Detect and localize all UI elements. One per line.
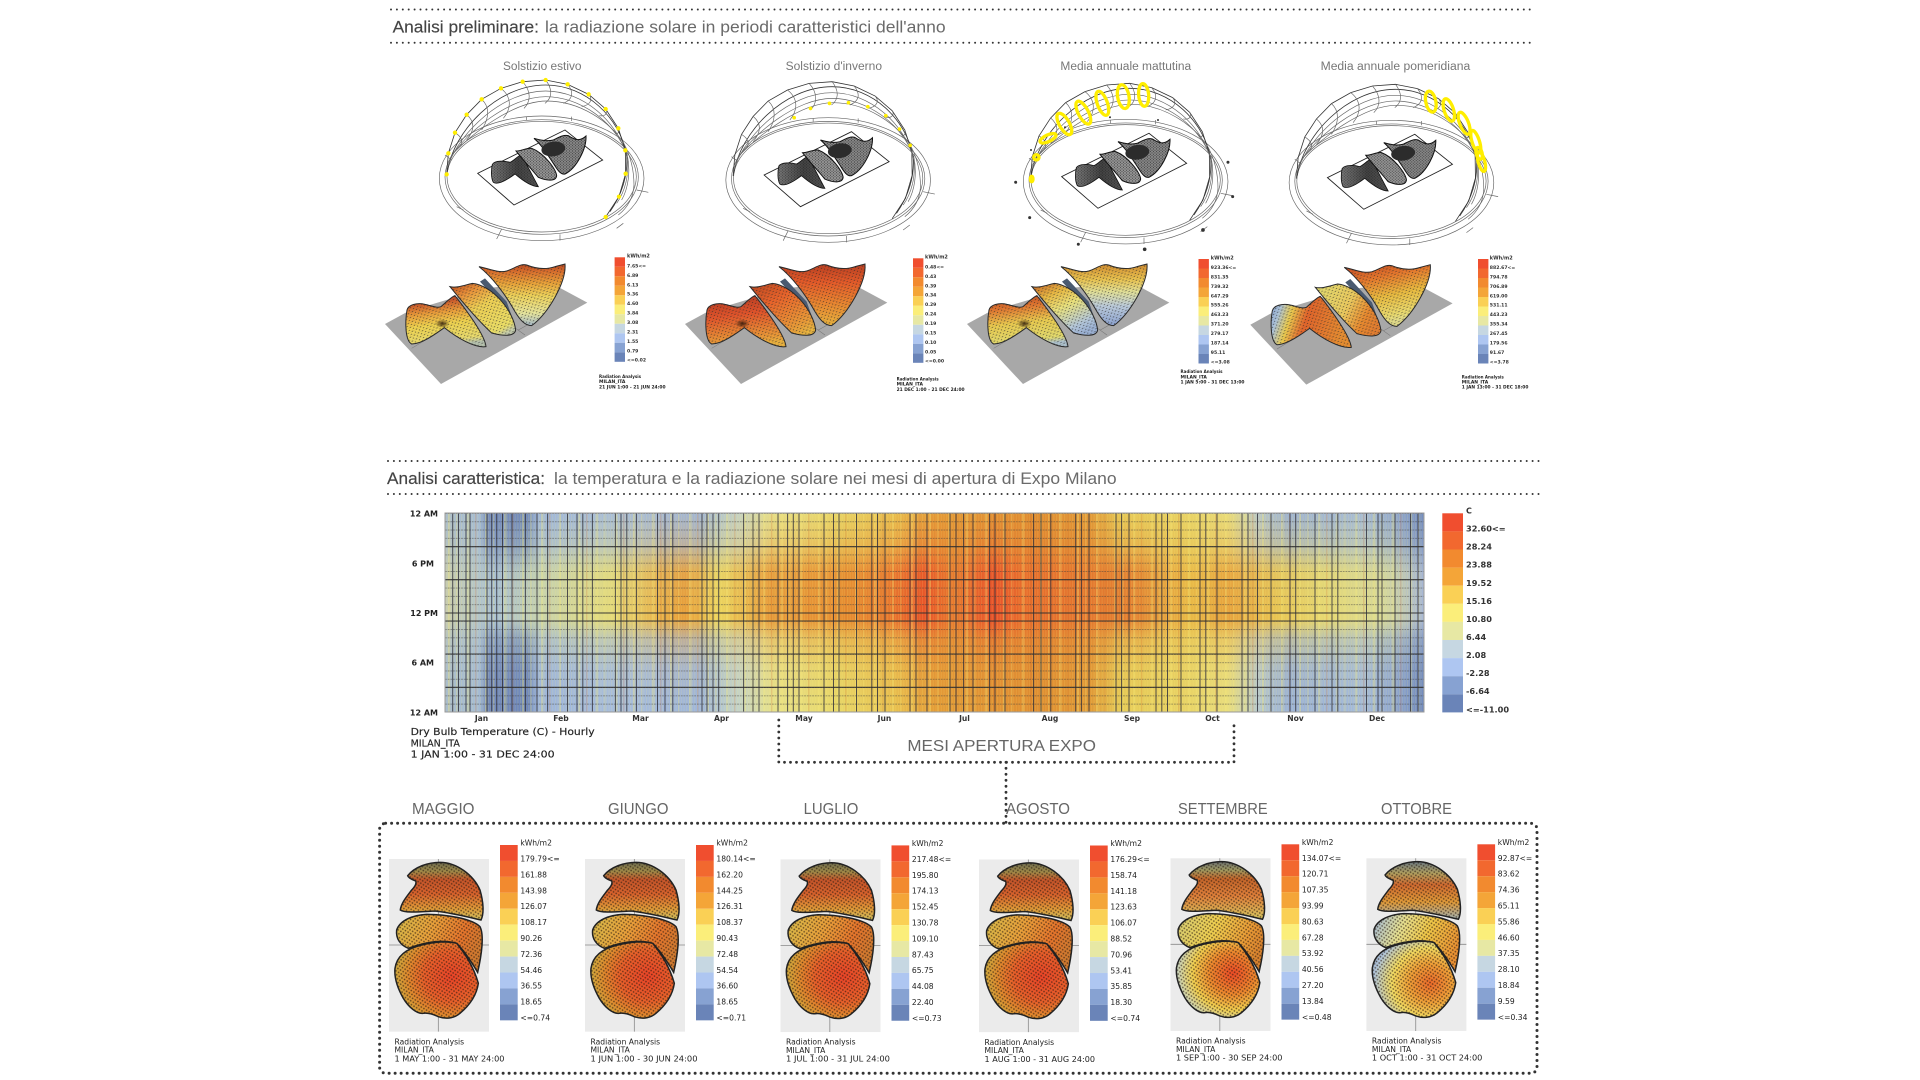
heatmap legend: <=-11.00 [1466,704,1509,714]
legend: media annuale pomeridiana: 531.11 [1490,303,1508,309]
caption: media annuale pomeridiana: Radiation Analysis [1462,374,1504,380]
panel: settembre: <=0.48 [1302,1013,1332,1022]
heading: analisi preliminare: la radiazione solare in periodi caratteristici dell'anno [545,18,946,36]
panel: giugno: 18.65 [716,998,738,1007]
panel: giugno: kWh/m2 [716,838,748,848]
legend: media annuale mattutina: 647.29 [1211,293,1229,299]
panel: maggio: Radiation Analysis [394,1037,464,1046]
panel: maggio [389,838,560,1063]
legend: solstizio d'inverno [913,255,948,365]
legend: media annuale pomeridiana: <=3.78 [1490,359,1509,365]
panel: giugno: Radiation Analysis [590,1037,660,1046]
legend: solstizio d'inverno: 0.19 [925,321,936,327]
caption: solstizio estivo: Radiation Analysis [599,374,641,380]
panel: maggio: MILAN_ITA [394,1046,435,1055]
heatmap caption: Dry Bulb Temperature (C) - Hourly [411,727,595,738]
bracket: mesi apertura expo [779,720,1234,823]
heatmap month axis: Jul [958,714,970,723]
panel: settembre: 67.28 [1302,933,1324,942]
legend: media annuale pomeridiana: kWh/m2 [1490,255,1513,261]
panel: maggio: 161.88 [520,870,547,879]
legend: solstizio estivo: 4.60 [627,301,638,307]
caption: solstizio d'inverno: 21 DEC 1:00 - 21 DEC 24:00 [897,387,965,393]
panel: agosto: 176.29<= [1110,855,1150,864]
heatmap legend [1442,506,1509,714]
heatmap caption [411,727,595,760]
legend: solstizio estivo: 1.55 [627,339,638,345]
panel: giugno: 36.60 [716,982,738,991]
panel: settembre: 134.07<= [1302,854,1341,863]
panel: luglio: 174.13 [912,887,939,896]
panel: settembre: Radiation Analysis [1176,1037,1246,1046]
panel: ottobre: 1 OCT 1:00 - 31 OCT 24:00 [1372,1054,1483,1063]
month titles: AGOSTO [1006,801,1070,818]
label: solstizio d'inverno: Solstizio d'inverno [786,61,882,73]
legend: media annuale mattutina: 371.20 [1211,322,1229,328]
panel: luglio: 1 JUL 1:00 - 31 JUL 24:00 [786,1055,890,1064]
sun path dome: solstizio d'inverno [726,82,935,242]
heatmap month axis: Nov [1287,714,1304,723]
heatmap caption: MILAN_ITA [411,739,460,750]
panel: settembre: 13.84 [1302,997,1324,1006]
panel: agosto: 53.41 [1110,966,1132,975]
sun path dome: media annuale pomeridiana [1289,84,1498,245]
month titles: GIUNGO [608,801,668,818]
legend: solstizio estivo: 3.84 [627,311,638,317]
legend: solstizio d'inverno: 0.10 [925,340,936,346]
panel: agosto: 70.96 [1110,950,1132,959]
label: media annuale pomeridiana: Media annuale pomeridiana [1321,61,1471,73]
legend: media annuale mattutina: 923.36<= [1211,266,1236,271]
heatmap legend: 2.08 [1466,650,1487,660]
heatmap month axis: Oct [1205,714,1220,723]
label: media annuale mattutina: Media annuale mattutina [1060,61,1192,73]
radiation model: media annuale pomeridiana [1250,265,1453,385]
panel: agosto: Radiation Analysis [984,1038,1054,1047]
panel: luglio: 195.80 [912,871,939,880]
heading: analisi caratteristica: Analisi caratteristica: [387,470,545,488]
panel: agosto: 1 AUG 1:00 - 31 AUG 24:00 [984,1055,1095,1064]
legend: solstizio d'inverno: 0.24 [925,312,936,318]
panel: giugno: 126.31 [716,902,743,911]
panel: ottobre: <=0.34 [1498,1013,1528,1022]
panel: luglio: MILAN_ITA [786,1046,826,1055]
legend: solstizio d'inverno: 0.05 [925,349,936,355]
panel: giugno: 108.37 [716,918,743,927]
legend: solstizio d'inverno: <=0.00 [925,359,944,365]
heatmap legend: -2.28 [1466,668,1490,678]
panel: luglio: 109.10 [912,934,939,943]
heatmap: dry bulb temperature [445,513,1424,712]
heatmap legend: 15.16 [1466,596,1492,606]
panel: maggio: kWh/m2 [520,838,552,848]
heading: analisi preliminare: Analisi preliminare: [393,18,539,36]
caption: media annuale mattutina [1180,369,1244,386]
heatmap month axis: Dec [1369,714,1385,723]
panel: giugno: MILAN_ITA [590,1046,631,1055]
heatmap hour axis: 6 PM [412,559,434,568]
panel: agosto: 18.30 [1110,998,1132,1007]
panel: giugno: 1 JUN 1:00 - 30 JUN 24:00 [590,1054,698,1063]
radiation model: solstizio d'inverno [685,264,887,384]
panel: giugno: 54.54 [716,966,738,975]
heatmap month axis: May [795,714,813,723]
caption: solstizio estivo [599,374,666,390]
panel: maggio: <=0.74 [520,1014,550,1022]
legend: media annuale pomeridiana: 267.45 [1490,331,1508,337]
heatmap legend: 28.24 [1466,542,1492,552]
panel: ottobre: 65.11 [1498,902,1520,911]
panel: giugno: 90.43 [716,934,738,943]
legend: media annuale mattutina: 279.17 [1211,331,1229,337]
legend: media annuale mattutina: <=3.08 [1211,359,1230,365]
legend: media annuale pomeridiana: 706.89 [1490,284,1508,290]
panel: luglio: 217.48<= [912,855,951,864]
legend: solstizio d'inverno: 0.29 [925,302,936,308]
heatmap legend: C [1466,506,1472,516]
panel: luglio: 152.45 [912,903,939,912]
heatmap legend: 32.60<= [1466,524,1506,534]
panel: agosto: <=0.74 [1110,1014,1140,1023]
caption: solstizio d'inverno: MILAN_ITA [897,382,924,388]
panel: agosto: 106.07 [1110,919,1137,928]
radiation model: media annuale mattutina [967,264,1169,384]
legend: solstizio estivo: 3.08 [627,320,638,326]
panel: agosto: MILAN_ITA [984,1046,1025,1055]
legend: solstizio estivo: 5.36 [627,292,638,298]
panel: giugno: 180.14<= [716,854,756,864]
panel: luglio: 44.08 [912,982,934,991]
legend: media annuale mattutina: 555.26 [1211,303,1229,309]
panel: luglio: Radiation Analysis [786,1038,856,1047]
panel: luglio: 22.40 [912,998,934,1007]
panel: agosto: 88.52 [1110,934,1132,944]
panel: maggio: 90.26 [520,934,542,943]
panel: maggio: 143.98 [520,886,547,895]
legend: media annuale mattutina: 187.14 [1211,340,1229,346]
caption: solstizio d'inverno [897,376,965,393]
panel: luglio [780,839,951,1064]
panel: agosto: kWh/m2 [1110,839,1142,848]
panel: luglio: kWh/m2 [912,839,944,848]
legend: media annuale pomeridiana: 443.23 [1490,312,1508,318]
heatmap legend: 19.52 [1466,578,1492,588]
caption: media annuale mattutina: 1 JAN 5:00 - 31 DEC 13:00 [1180,380,1244,386]
heatmap hour axis: 12 AM [410,509,438,518]
heading: analisi preliminare [391,10,1533,43]
panel: giugno: 162.20 [716,870,743,879]
heatmap legend: 6.44 [1466,632,1487,642]
panel: settembre: 53.92 [1302,949,1324,958]
panel: luglio: <=0.73 [912,1014,942,1023]
legend: media annuale pomeridiana: 179.56 [1490,340,1508,346]
legend: solstizio d'inverno: 0.39 [925,283,936,289]
legend: solstizio d'inverno: kWh/m2 [925,255,948,261]
caption: solstizio estivo: MILAN_ITA [599,379,626,385]
panel: giugno: 72.48 [716,950,738,959]
heatmap month axis: Aug [1042,714,1058,723]
bracket: mesi apertura expo: MESI APERTURA EXPO [907,738,1096,755]
legend: solstizio estivo: 2.31 [627,329,638,335]
panel: giugno [585,838,756,1063]
legend: solstizio d'inverno: 0.34 [925,293,936,299]
legend: media annuale pomeridiana: 619.00 [1490,293,1508,299]
panel: maggio: 1 MAY 1:00 - 31 MAY 24:00 [394,1054,505,1063]
panel: ottobre: 9.59 [1498,997,1515,1006]
caption: solstizio estivo: 21 JUN 1:00 - 21 JUN 24:00 [599,384,666,390]
panel: luglio: 87.43 [912,950,934,959]
legend: media annuale mattutina: 739.32 [1211,284,1229,290]
panel: maggio: 18.65 [520,998,542,1007]
month titles [412,801,1452,818]
month titles: LUGLIO [804,801,858,818]
legend: media annuale mattutina: kWh/m2 [1211,255,1234,261]
panel: agosto: 35.85 [1110,982,1132,991]
panel: ottobre: MILAN_ITA [1372,1045,1412,1054]
panel: agosto: 158.74 [1110,871,1137,880]
dotted frame around monthly panels [380,823,1537,1073]
legend: media annuale pomeridiana [1478,255,1515,365]
heatmap legend: 10.80 [1466,614,1492,624]
panel: ottobre: 37.35 [1498,949,1520,958]
panel: ottobre: kWh/m2 [1498,838,1529,847]
panel: settembre [1170,838,1341,1063]
panel: ottobre: 74.36 [1498,886,1520,895]
month titles: SETTEMBRE [1178,801,1268,818]
panel: settembre: 107.35 [1302,886,1329,895]
heatmap month axis: Jan [474,714,488,723]
heatmap month axis: Sep [1124,714,1141,723]
heatmap hour axis: 12 PM [410,609,438,618]
panel: agosto: 123.63 [1110,903,1137,912]
month titles: MAGGIO [412,801,474,818]
heading: analisi caratteristica [387,461,1539,494]
legend: media annuale mattutina: 463.23 [1211,312,1229,318]
legend: solstizio estivo: <=0.02 [627,358,646,364]
radiation model: solstizio estivo [385,264,587,384]
legend: media annuale mattutina: 831.35 [1211,274,1229,280]
panel: settembre: 1 SEP 1:00 - 30 SEP 24:00 [1176,1054,1283,1063]
panel: giugno: <=0.71 [716,1014,746,1022]
legend: solstizio estivo: kWh/m2 [627,254,650,260]
heatmap month axis: Mar [632,714,649,723]
heatmap month axis: Apr [714,714,729,723]
caption: media annuale pomeridiana [1462,374,1528,390]
panel: ottobre: 46.60 [1498,933,1520,942]
sun path dome: solstizio estivo [439,78,648,241]
panel: ottobre: 28.10 [1498,965,1520,974]
heatmap legend: -6.64 [1466,686,1490,696]
caption: media annuale mattutina: MILAN_ITA [1180,374,1207,380]
legend: solstizio d'inverno: 0.43 [925,274,936,280]
heatmap hour axis [410,509,438,717]
caption: media annuale pomeridiana: MILAN_ITA [1462,380,1489,386]
legend: solstizio d'inverno: 0.48<= [925,265,944,270]
panel: maggio: 36.55 [520,982,542,991]
heatmap hour axis: 12 AM [410,708,438,717]
heatmap legend: 23.88 [1466,560,1492,570]
legend: media annuale mattutina [1198,255,1236,365]
heatmap caption: 1 JAN 1:00 - 31 DEC 24:00 [411,750,555,760]
panel: agosto [979,839,1150,1064]
panel: ottobre: 83.62 [1498,870,1520,879]
panel: luglio: 130.78 [912,918,939,927]
panel: maggio: 108.17 [520,918,547,927]
caption: solstizio d'inverno: Radiation Analysis [897,376,939,382]
month titles: OTTOBRE [1381,801,1452,818]
heatmap hour axis: 6 AM [411,658,434,667]
panel: maggio: 54.46 [520,966,542,975]
heatmap month axis: Feb [553,714,569,723]
caption: media annuale pomeridiana: 1 JAN 13:00 - 31 DEC 18:00 [1462,384,1528,390]
panel: settembre: 120.71 [1302,870,1329,879]
panel: settembre: MILAN_ITA [1176,1045,1216,1054]
legend: solstizio estivo: 0.79 [627,348,638,354]
panel: settembre: kWh/m2 [1302,838,1334,847]
heatmap month axis [474,714,1385,723]
panel: settembre: 80.63 [1302,917,1324,926]
panel: maggio: 72.36 [520,950,542,959]
panel: ottobre: 55.86 [1498,917,1520,926]
legend: solstizio estivo [615,254,650,364]
legend: media annuale pomeridiana: 355.34 [1490,322,1508,328]
label: solstizio estivo: Solstizio estivo [503,61,582,73]
heatmap month axis: Jun [877,714,891,723]
legend: media annuale pomeridiana: 882.67<= [1490,266,1515,271]
panel: ottobre: 18.84 [1498,981,1520,990]
panel: giugno: 144.25 [716,886,743,895]
panel: settembre: 93.99 [1302,902,1324,911]
panel: agosto: 141.18 [1110,887,1137,896]
panel: ottobre: 92.87<= [1498,854,1532,863]
sun path dome: media annuale mattutina [1014,83,1234,251]
panel: ottobre: Radiation Analysis [1372,1037,1442,1046]
legend: solstizio d'inverno: 0.15 [925,330,936,336]
legend: media annuale mattutina: 95.11 [1211,350,1225,356]
legend: solstizio estivo: 7.65<= [627,264,646,269]
panel: maggio: 126.07 [520,902,547,911]
heading: analisi caratteristica: la temperatura e la radiazione solare nei mesi di apertura di Expo Milano [554,470,1117,488]
panel: settembre: 40.56 [1302,965,1324,974]
caption: media annuale mattutina: Radiation Analysis [1180,369,1223,375]
legend: media annuale pomeridiana: 794.78 [1490,274,1508,280]
legend: solstizio estivo: 6.13 [627,282,638,288]
panel: settembre: 27.20 [1302,981,1324,990]
legend: media annuale pomeridiana: 91.67 [1490,350,1504,356]
panel: maggio: 179.79<= [520,854,560,864]
panel: luglio: 65.75 [912,966,934,975]
legend: solstizio estivo: 6.89 [627,273,638,279]
panel: ottobre [1366,838,1532,1063]
